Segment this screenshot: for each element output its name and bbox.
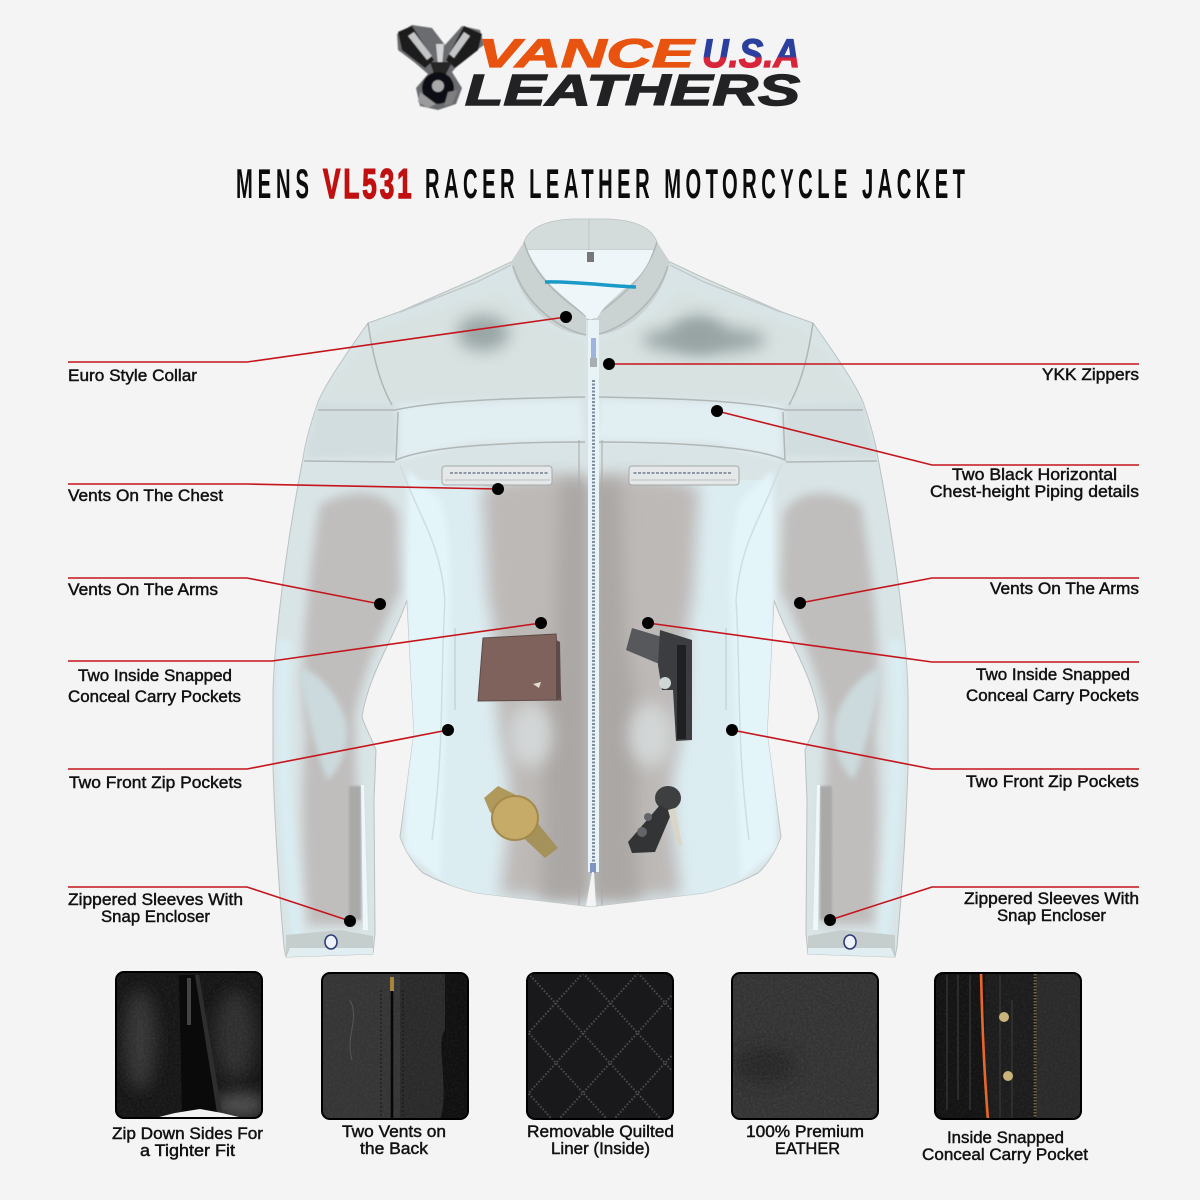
caption: 100% Premium [746,1123,864,1141]
label: conceal carry right: Conceal Carry Pockets [966,687,1139,705]
label: chest piping: Chest-height Piping details [930,483,1139,501]
caption [527,1123,674,1158]
label: zippered sleeves left: Zippered Sleeves With [68,891,243,909]
photo: quilted lining [528,974,672,1118]
jacket illustration [273,219,908,958]
caption: the Back [360,1140,429,1158]
caption: EATHER [775,1140,840,1158]
label: zippered sleeves left: Snap Encloser [101,908,210,926]
label: conceal carry left [68,667,241,706]
caption: Zip Down Sides For [112,1125,264,1143]
label: conceal carry right [966,666,1139,705]
label: YKK Zippers: YKK Zippers [1042,366,1139,384]
panel: zip down sides [112,971,266,1160]
caption: Liner (Inside) [551,1140,650,1158]
caption [112,1125,264,1160]
label: front zip left: Two Front Zip Pockets [69,774,242,792]
caption: a Tighter Fit [140,1142,235,1160]
label: conceal carry left: Conceal Carry Pockets [68,688,241,706]
label: chest piping: Two Black Horizontal [952,466,1117,484]
panel: vents on the back [321,972,469,1158]
photo: leather texture [731,972,879,1120]
handgun [626,628,692,741]
caption [342,1123,446,1158]
caption: Removable Quilted [527,1123,674,1141]
caption: Inside Snapped [947,1129,1064,1147]
callout leader lines and dots [68,311,1139,927]
label: Vents On The Chest: Vents On The Chest [68,487,223,505]
car key fob [628,786,682,853]
wordmark VANCE: VANCE [478,32,696,76]
inner collar and lining [528,250,653,318]
wordmark U.S.A: U.S.A [702,32,800,76]
wallet [478,634,561,701]
wordmark LEATHERS: LEATHERS [465,66,800,115]
wristwatch [484,786,558,858]
label: chest piping [930,466,1139,501]
center zipper [586,320,599,906]
icon: v-twin engine [397,25,484,110]
label: zippered sleeves right [964,890,1139,925]
caption: Conceal Carry Pocket [922,1146,1088,1164]
photo: side zipper [115,971,266,1119]
label: Vents On The Arms left: Vents On The Arms [68,581,218,599]
label: zippered sleeves right: Snap Encloser [997,907,1106,925]
caption [922,1129,1088,1164]
title: VL531 [323,161,412,208]
panel: inside conceal carry pocket [922,972,1088,1164]
label: front zip right: Two Front Zip Pockets [966,773,1139,791]
panel: quilted liner [526,972,674,1158]
title: MENS [236,160,309,207]
label: conceal carry right: Two Inside Snapped [976,666,1130,684]
label: zippered sleeves right: Zippered Sleeves With [964,890,1139,908]
label: zippered sleeves left [68,891,243,926]
logo: Vance Leathers USA [397,25,800,115]
label: Vents On The Arms right: Vents On The Arms [990,580,1139,598]
label: Euro Style Collar: Euro Style Collar [68,367,198,385]
caption: Two Vents on [342,1123,446,1141]
caption [746,1123,864,1158]
label: conceal carry left: Two Inside Snapped [78,667,232,685]
photo: back vent [321,972,469,1120]
photo: inner pocket [934,972,1082,1120]
title: RACER LEATHER MOTORCYCLE JACKET [425,160,965,207]
panel: premium leather [731,972,879,1158]
